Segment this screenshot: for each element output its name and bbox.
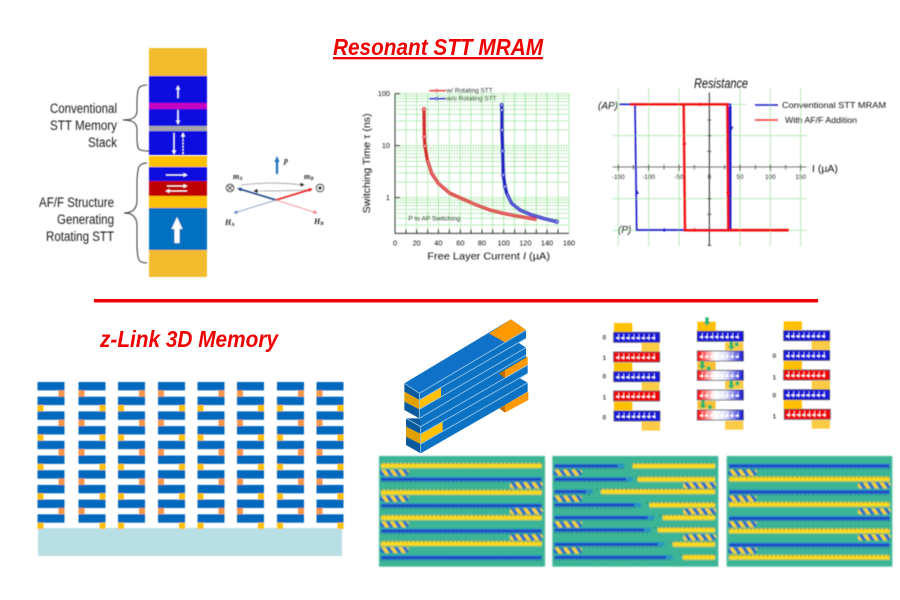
- diagram: rotating vectors: H: [225, 218, 231, 227]
- chart: resistance hysteresis: [598, 76, 886, 246]
- title: z-Link 3D Memory: z-Link 3D Memory: [99, 326, 279, 352]
- hysteresis legend: [755, 100, 886, 125]
- left register: 1: [602, 394, 606, 401]
- panel: memory stack diagram: [39, 48, 207, 277]
- substrate: [38, 528, 342, 556]
- panel: domain wall shift registers: [602, 317, 830, 431]
- panel: z-Link array cross section: [38, 382, 344, 556]
- label: AP state: (AP): [598, 101, 618, 112]
- left register: 0: [602, 374, 606, 381]
- x tick labels: 160: [563, 238, 575, 247]
- diagram: rotating vectors: m: [304, 172, 310, 181]
- brace: AF/F structure: [124, 163, 147, 263]
- label: AF/F Structure Generating Rotating STT: [39, 195, 114, 244]
- chart legend: [429, 88, 497, 103]
- orange end connectors: [499, 357, 528, 413]
- x tick labels: 40: [434, 238, 442, 247]
- hysteresis plot: -150: [612, 174, 625, 181]
- simulation panel: final state: [727, 456, 892, 567]
- chart annotation: P to AP Switching: [408, 216, 461, 223]
- label: Conventional STT Memory Stack: [50, 101, 117, 150]
- upper bar end face: [404, 383, 441, 418]
- title: Resonant STT MRAM: Resonant STT MRAM: [333, 34, 544, 60]
- diagram: rotating vectors: A: [238, 177, 243, 182]
- left register: [602, 323, 660, 431]
- hysteresis plot: 100: [765, 174, 776, 181]
- stack layers: [149, 48, 207, 277]
- x tick labels: 0: [393, 238, 397, 247]
- x tick labels: 20: [413, 238, 421, 247]
- hysteresis plot: -50: [674, 174, 684, 181]
- bar edge highlights: [404, 330, 528, 453]
- hysteresis plot: 50: [736, 174, 744, 181]
- memory columns: [38, 382, 344, 529]
- hysteresis plot: 0: [708, 174, 712, 181]
- x tick labels: 60: [456, 238, 464, 247]
- left register: 0: [602, 414, 606, 421]
- label: Conventional STT Memory Stack: Conventional: [50, 101, 117, 116]
- stack magnetization arrows: [166, 86, 187, 243]
- top face and orange cap: [404, 319, 526, 393]
- chart grid: [395, 94, 569, 233]
- y axis title: Switching Time τ (ns): [362, 113, 373, 213]
- brace: conventional stack: [123, 85, 149, 151]
- label: AF/F Structure Generating Rotating STT: Generating: [57, 212, 114, 227]
- hysteresis plot: [612, 88, 807, 246]
- diagram: rotating vectors: p: [283, 156, 288, 165]
- simulation panel: initial state: [379, 456, 545, 567]
- hysteresis plot: -100: [642, 174, 655, 181]
- diagram: rotating vectors: B: [319, 222, 324, 227]
- right register: 0: [772, 392, 776, 399]
- curve: with rotating STT: [422, 108, 537, 219]
- label: AF/F Structure Generating Rotating STT: AF/F Structure: [39, 195, 114, 210]
- diagram: rotating vectors: H: [314, 217, 320, 226]
- diagram: rotating vectors: B: [309, 177, 314, 182]
- label: AF/F Structure Generating Rotating STT: Rotating STT: [46, 229, 114, 244]
- divider: [94, 299, 818, 302]
- simulation panel: domain wall motion: [552, 456, 718, 567]
- y tick labels: 10: [382, 141, 390, 150]
- x tick labels: [393, 238, 575, 247]
- diagram: rotating vectors: A: [230, 223, 235, 228]
- hysteresis plot: 150: [795, 174, 806, 181]
- panel: 3D z-Link bars: [404, 319, 528, 453]
- x axis label: I (µA): [812, 163, 838, 175]
- x tick labels: 140: [541, 238, 553, 247]
- chart legend: w/ Rotating STT: [446, 88, 493, 95]
- x axis title: Free Layer Current I (µA): [427, 251, 550, 262]
- lower bar end face: [406, 418, 443, 453]
- right register: [772, 321, 830, 429]
- hysteresis legend: With AF/F Addition: [785, 115, 857, 125]
- label: Conventional STT Memory Stack: Stack: [88, 135, 117, 150]
- y tick labels: 1: [386, 193, 390, 202]
- curve: without rotating STT: [500, 103, 558, 223]
- right register: 1: [772, 414, 776, 421]
- y tick labels: 100: [378, 89, 390, 98]
- chart axes: [395, 94, 569, 233]
- right register: 0: [772, 353, 776, 360]
- y tick labels: [378, 89, 390, 202]
- left register: 0: [602, 334, 606, 341]
- chart title: Resistance: Resistance: [694, 76, 748, 91]
- center register with spin current: [697, 317, 743, 430]
- side faces of stacked bars: [419, 330, 528, 453]
- x tick labels: 120: [519, 238, 531, 247]
- left register: 1: [602, 355, 606, 362]
- label: Conventional STT Memory Stack: STT Memory: [50, 118, 117, 133]
- chart legend: w/o Rotating STT: [446, 96, 497, 103]
- right register: 1: [772, 374, 776, 381]
- diagram: rotating vectors: [224, 156, 324, 228]
- label: P state: (P): [618, 225, 631, 236]
- x tick labels: 100: [498, 238, 510, 247]
- chart: switching time vs free layer current: [362, 88, 575, 262]
- hysteresis legend: Conventional STT MRAM: [782, 100, 886, 110]
- diagram: rotating vectors: m: [233, 172, 239, 181]
- x tick labels: 80: [478, 238, 486, 247]
